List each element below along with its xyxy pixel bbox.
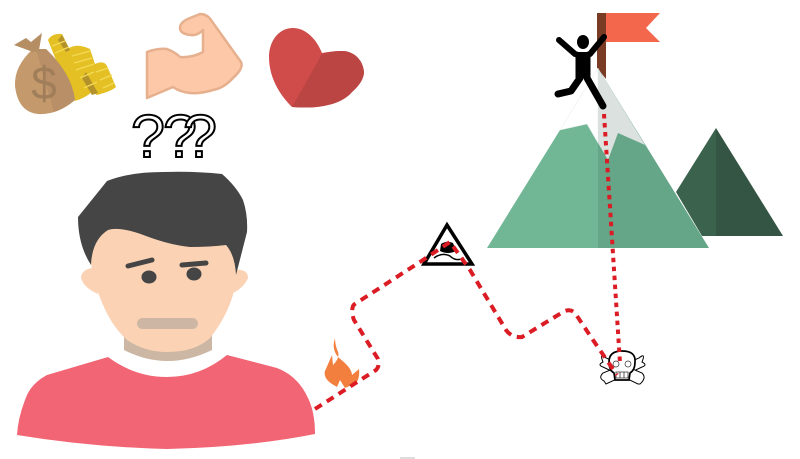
icon: fire	[325, 338, 359, 388]
question marks: ?	[131, 103, 165, 170]
back mountain	[676, 128, 783, 236]
mouth	[137, 318, 198, 329]
eyebrows	[128, 260, 206, 266]
icon: flexed arm	[147, 14, 242, 98]
icon: money bag and coins	[14, 33, 116, 114]
face	[91, 190, 236, 352]
hair	[78, 172, 247, 275]
question marks: ?	[183, 103, 217, 170]
question marks	[131, 103, 217, 170]
bag tie	[14, 33, 44, 52]
cropped caption remnant	[400, 457, 415, 459]
eyes	[142, 270, 156, 284]
flag	[597, 13, 660, 79]
snow cap	[560, 68, 598, 143]
dashed route line	[315, 242, 617, 409]
bag body	[15, 49, 75, 114]
question marks: ?	[163, 103, 197, 170]
icon: skull and crossbones	[600, 351, 645, 384]
ears	[81, 268, 98, 294]
dotted route line to summit	[604, 114, 620, 363]
neck	[124, 330, 212, 361]
icon: slippery road warning sign	[424, 225, 472, 264]
coin stacks	[48, 34, 116, 101]
icon: heart	[269, 28, 364, 108]
front mountain	[487, 68, 709, 248]
climber silhouette	[558, 35, 604, 106]
person	[17, 172, 315, 449]
dollar sign: $	[31, 57, 57, 109]
shirt	[17, 355, 315, 449]
